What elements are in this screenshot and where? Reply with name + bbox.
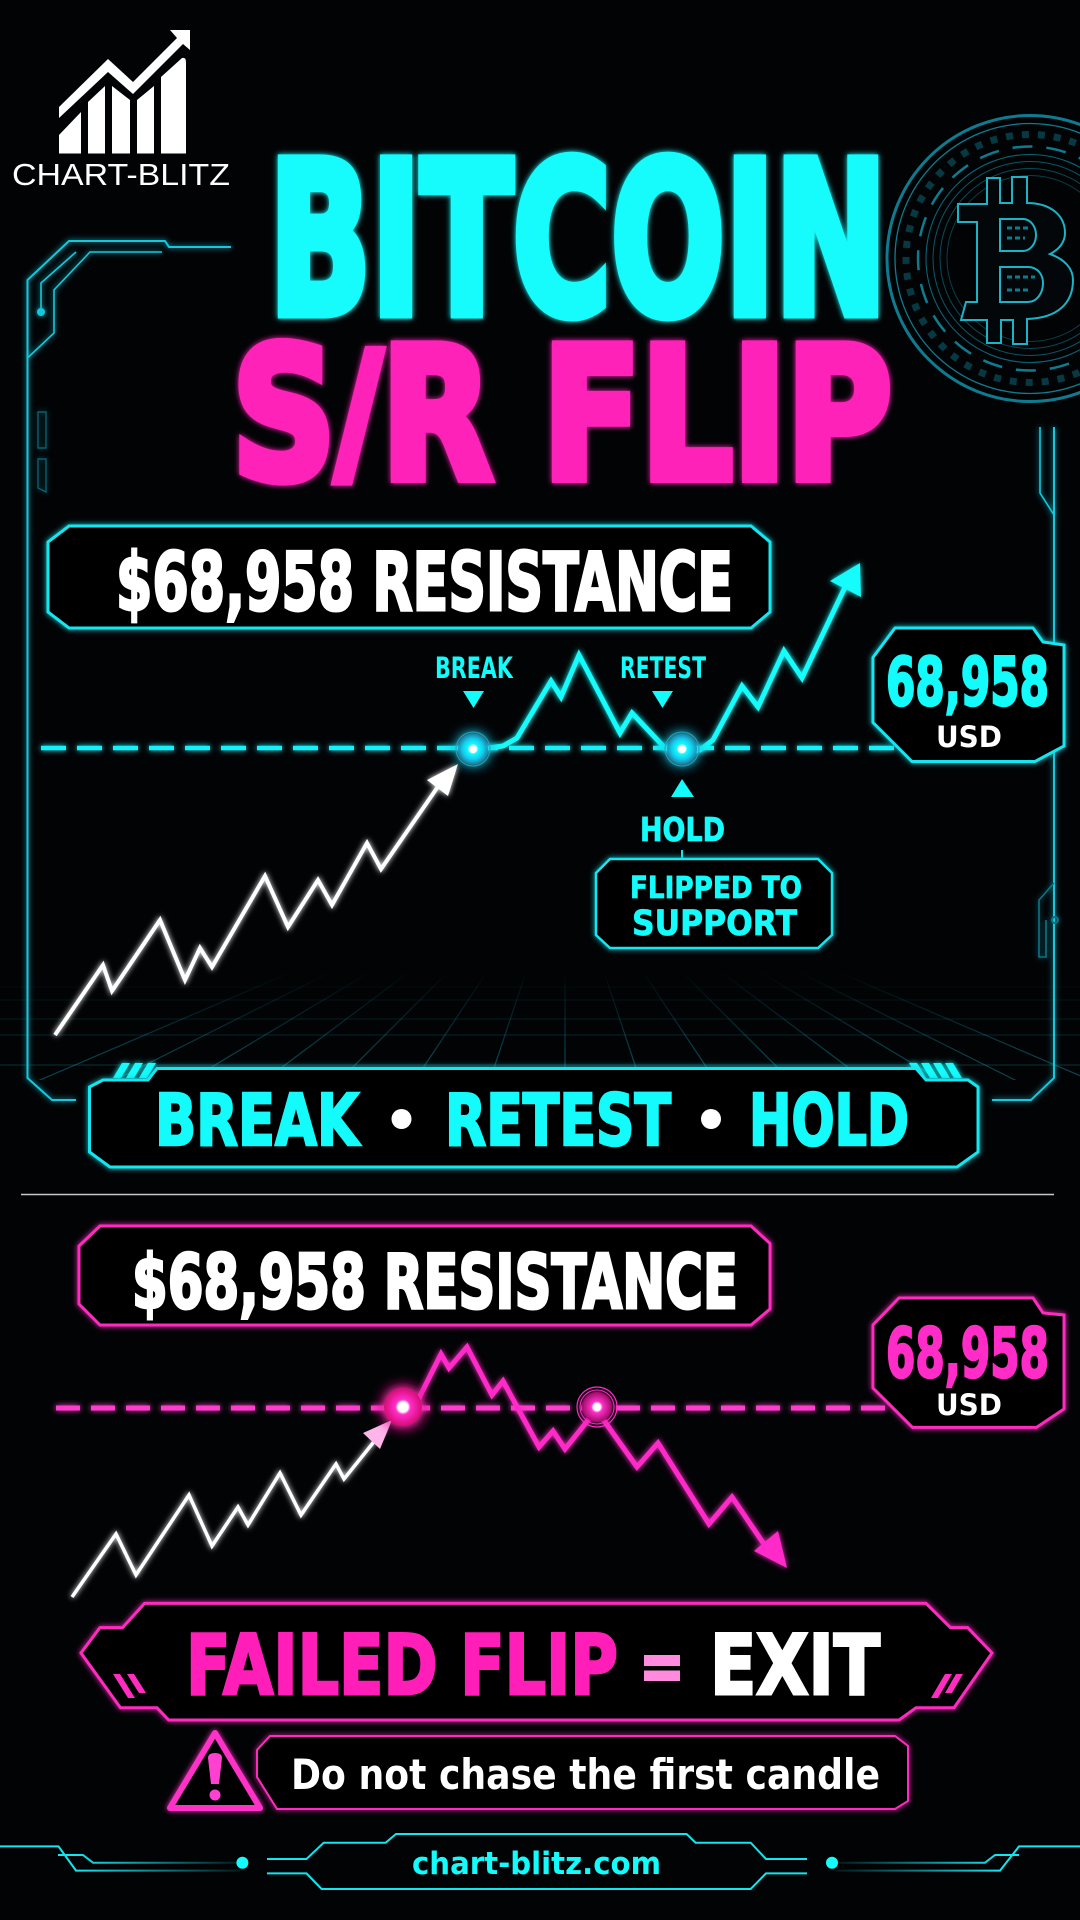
banner: failed flip = exit: FAILED FLIP — [186, 1617, 618, 1714]
section divider — [21, 1194, 1054, 1196]
marker: retest node — [665, 732, 699, 766]
price badge: pink 68,958 usd: USD — [936, 1388, 1002, 1422]
title: S/R FLIP: R FLIP — [381, 309, 892, 521]
panel: pink resistance label: $68,958 RESISTANCE — [132, 1238, 738, 1326]
banner: break retest hold: BREAK — [155, 1079, 361, 1162]
banner: break retest hold: RETEST — [445, 1079, 671, 1162]
footer: circuit ornament and url — [0, 1834, 1080, 1889]
arrow head — [427, 764, 458, 796]
label: break: BREAK — [435, 651, 514, 685]
logo: chart-blitz — [12, 30, 230, 192]
decorative stripes — [113, 1674, 963, 1698]
label: hold — [640, 779, 725, 859]
left circuit — [0, 1846, 248, 1871]
banner: failed flip = exit — [81, 1603, 992, 1720]
right circuit — [826, 1846, 1080, 1871]
panel frame: cyan hud border — [28, 241, 1058, 1100]
perspective grid floor — [0, 980, 1080, 1080]
title: S/R FLIP: / — [336, 320, 382, 504]
arrow head — [754, 1531, 787, 1568]
arrow head — [830, 563, 861, 597]
callout: flipped to support: SUPPORT — [632, 904, 797, 944]
arrow head — [363, 1420, 392, 1449]
panel: do not chase the first candle — [257, 1736, 908, 1809]
callout: flipped to support: FLIPPED TO — [630, 871, 802, 906]
dashed resistance line: cyan — [41, 746, 902, 750]
marker: failed break node — [384, 1388, 422, 1426]
label: retest: RETEST — [620, 651, 706, 685]
logo wordmark: CHART-BLITZ — [12, 157, 230, 192]
panel: cyan resistance label — [48, 526, 770, 629]
decorative stripes — [113, 1063, 962, 1078]
marker: failed retest node — [577, 1387, 617, 1427]
banner: failed flip = exit: EXIT — [710, 1617, 880, 1714]
dashed resistance line: pink — [56, 1406, 895, 1410]
title: S/R FLIP: S — [232, 309, 363, 521]
pink falling price line — [417, 1347, 787, 1568]
marker: break node — [456, 732, 490, 766]
panel: pink resistance label — [79, 1226, 770, 1326]
banner: break retest hold — [90, 1063, 978, 1167]
panel: do not chase the first candle: Do not chase the first candle — [291, 1750, 880, 1799]
bitcoin symbol outline — [958, 177, 1073, 344]
callout: flipped to support — [596, 859, 832, 948]
warning icon — [170, 1733, 260, 1808]
price badge: cyan 68,958 usd: USD — [936, 720, 1002, 754]
icon: bitcoin coin — [887, 116, 1080, 402]
label: retest — [620, 651, 706, 708]
price badge: cyan 68,958 usd — [873, 628, 1064, 762]
label: hold: HOLD — [640, 810, 725, 849]
price badge: pink 68,958 usd — [873, 1298, 1064, 1427]
cyan price line after break — [489, 563, 861, 752]
panel: cyan resistance label: $68,958 RESISTANCE — [116, 536, 733, 629]
white rising price line — [55, 764, 458, 1035]
white rising price line: failed scenario — [72, 1420, 392, 1597]
banner: break retest hold: HOLD — [749, 1079, 909, 1162]
icon: bars and rising arrow — [59, 30, 190, 154]
url frame — [267, 1834, 807, 1889]
url text: chart-blitz.com — [412, 1846, 661, 1882]
label: break — [435, 651, 514, 708]
